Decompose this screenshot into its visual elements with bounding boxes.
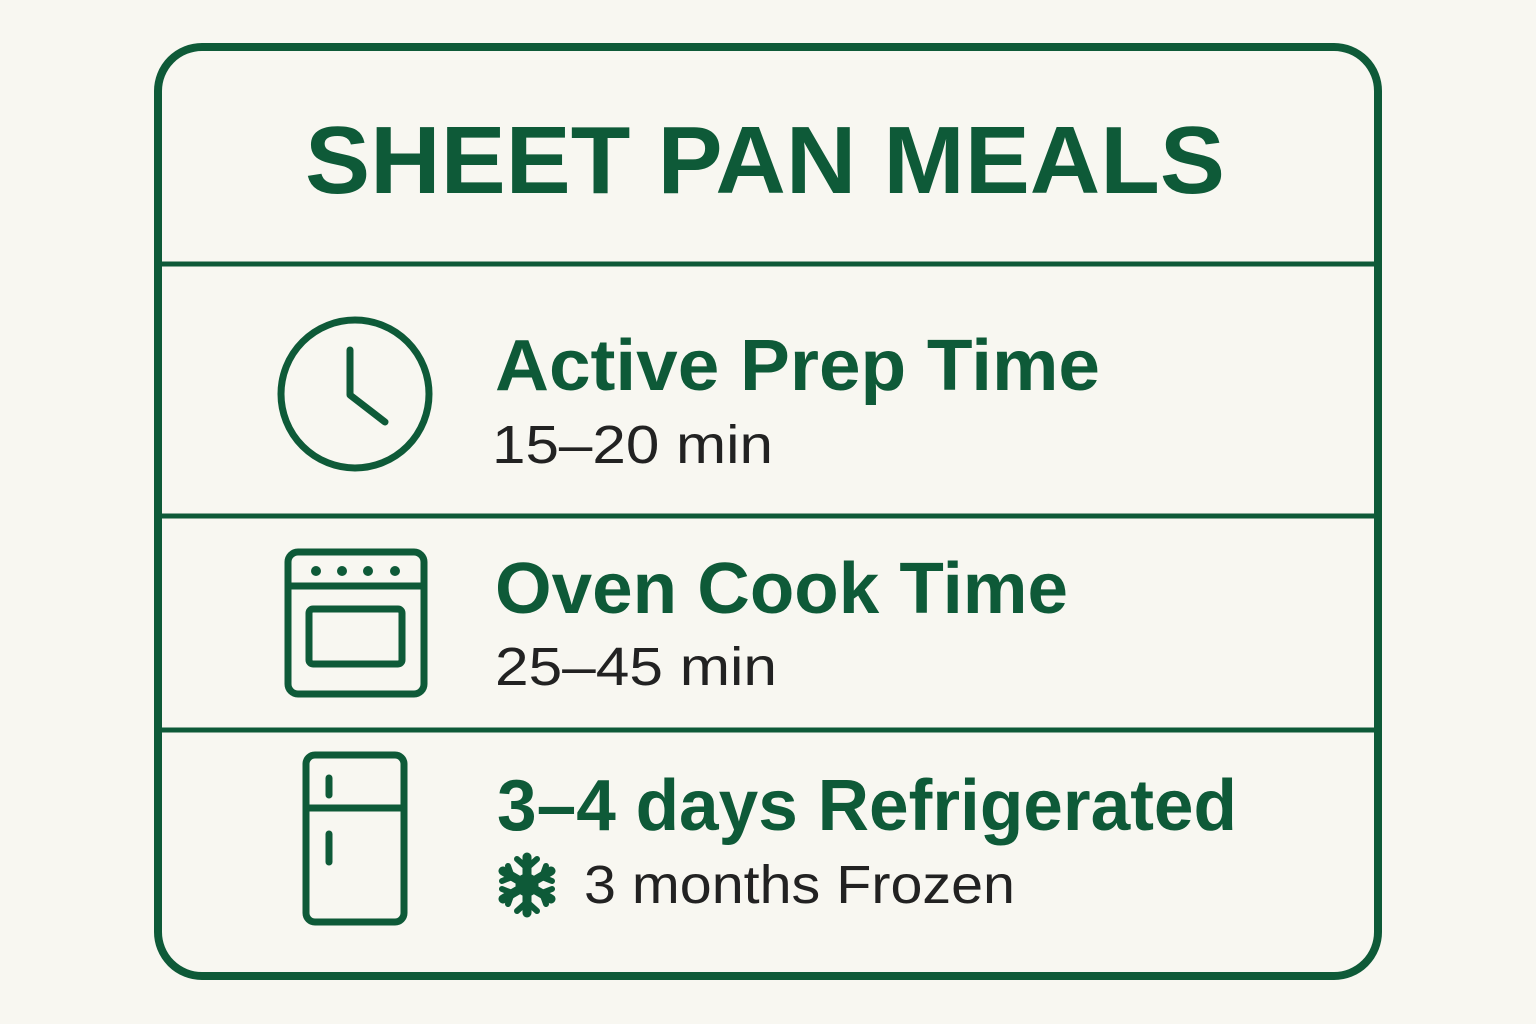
heading: refrigerated: 3–4 days Refrigerated (497, 766, 1237, 846)
icon: oven (288, 552, 424, 694)
title: SHEET PAN MEALS (305, 107, 1225, 214)
heading: active prep time: Active Prep Time (495, 326, 1100, 406)
panel: prep time (281, 320, 1100, 475)
heading: oven cook time: Oven Cook Time (495, 549, 1068, 629)
text: prep value: 15–20 min (492, 415, 773, 475)
icon: snowflake (502, 857, 552, 913)
panel: outer frame (158, 47, 1378, 976)
text: cook value: 25–45 min (495, 637, 777, 697)
icon: clock (281, 320, 429, 468)
panel: storage (306, 755, 1237, 922)
icon: fridge (306, 755, 404, 922)
text: frozen: 3 months Frozen (584, 855, 1015, 915)
panel: cook time (288, 549, 1068, 697)
